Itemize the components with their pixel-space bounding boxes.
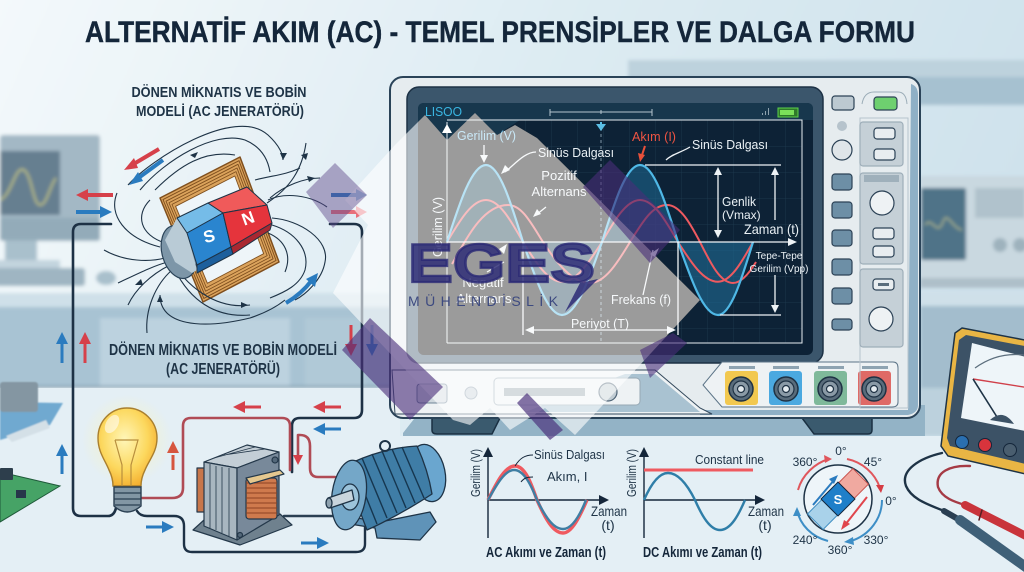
transformer xyxy=(193,445,292,545)
chart: AC current and time xyxy=(468,447,627,561)
screen xyxy=(418,103,813,355)
red sine waves xyxy=(447,200,756,283)
field arrowheads xyxy=(135,152,315,308)
status bar: LISOO xyxy=(425,104,462,119)
rotation angle diagram: 45° xyxy=(864,455,882,469)
circuit board green xyxy=(0,468,60,522)
screen labels: Tepe-Tepe xyxy=(756,251,803,262)
chart: AC current and time: Zaman xyxy=(591,503,627,519)
screen labels: Pozitif xyxy=(541,168,577,183)
chart: AC current and time: Gerilim (V) xyxy=(468,449,483,497)
pole labels xyxy=(201,207,257,247)
blue sine wave xyxy=(447,165,753,315)
rotation angle diagram: 0° xyxy=(835,444,847,458)
circuit board blue xyxy=(0,382,63,442)
current arrows xyxy=(56,149,378,549)
watermark purple shapes xyxy=(306,160,687,440)
heading: generator model bottom xyxy=(109,340,337,378)
chart: DC current and time xyxy=(624,447,784,561)
screen labels: Gerilim (V) xyxy=(430,197,445,257)
connector tray xyxy=(703,362,898,407)
status bar xyxy=(418,103,813,140)
chart: DC current and time: DC Akımı ve Zaman (t) xyxy=(643,545,762,561)
light bulb xyxy=(82,395,172,512)
screen labels: (Vmax) xyxy=(722,208,761,222)
chart: AC current and time: Akım, I xyxy=(547,469,587,484)
axes and measurement lines xyxy=(447,145,792,335)
table surface xyxy=(0,388,1024,572)
oscilloscope xyxy=(333,77,920,435)
coil xyxy=(160,157,279,302)
watermark translucent diamond xyxy=(333,113,700,435)
scope feet xyxy=(432,418,872,434)
right side controls xyxy=(832,92,908,408)
heading: generator model bottom: (AC JENERATÖRÜ) xyxy=(166,359,280,378)
rotation angle diagram: 0° xyxy=(885,494,897,508)
chart: DC current and time: Gerilim (V) xyxy=(624,449,639,497)
screen labels xyxy=(430,128,808,331)
screen labels: Negatif xyxy=(462,275,504,290)
chart: AC current and time: (t) xyxy=(601,517,615,533)
screen labels: Akım (I) xyxy=(632,129,676,144)
screen bezel xyxy=(407,87,823,363)
chart: AC current and time: Sinüs Dalgası xyxy=(534,447,605,462)
arrowheads xyxy=(480,155,797,334)
rotation angle diagram: 360° xyxy=(828,543,853,557)
generator: rotating magnet and coil xyxy=(104,126,327,333)
title: ALTERNATİF AKIM (AC) - TEMEL PRENSİPLER VE DALGA FORMU xyxy=(85,16,915,49)
pole labels: N xyxy=(239,207,257,229)
blue wave fills xyxy=(447,165,523,242)
scope body xyxy=(390,77,920,418)
chart: DC current and time: (t) xyxy=(758,517,772,533)
watermark logo: MÜHENDİSLİK xyxy=(408,292,559,309)
electric motor xyxy=(326,441,451,540)
screen labels: Sinüs Dalgası xyxy=(538,145,614,160)
chart: DC current and time: Constant line xyxy=(695,452,764,467)
heading: generator model top: DÖNEN MİKNATIS VE BOBİN xyxy=(132,84,306,101)
heading: generator model top: MODELİ (AC JENERATÖRÜ) xyxy=(136,103,304,120)
multimeter xyxy=(941,328,1024,475)
rotation angle diagram: 240° xyxy=(793,533,818,547)
magnetic field lines xyxy=(104,126,327,333)
chart: AC current and time: AC Akımı ve Zaman (t) xyxy=(486,545,606,561)
rotation angle diagram: 330° xyxy=(864,533,889,547)
screen labels: Frekans (f) xyxy=(611,292,671,307)
screen labels: Genlik xyxy=(722,194,756,209)
screen labels: Zaman (t) xyxy=(744,221,799,237)
screen labels: Gerilim (Vpp) xyxy=(750,264,808,275)
heading: generator model bottom: DÖNEN MİKNATIS VE BOBİN MODELİ xyxy=(109,340,337,359)
magnet poles xyxy=(177,187,272,273)
plot frame xyxy=(447,120,802,343)
watermark logo xyxy=(408,232,598,312)
screen labels: Periyot (T) xyxy=(571,316,629,331)
rotation angle diagram xyxy=(793,444,897,557)
magnet end cylinder xyxy=(156,222,202,282)
heading: generator model top xyxy=(132,84,306,120)
chart: DC current and time: Zaman xyxy=(748,503,784,519)
rotation angle diagram: 360° xyxy=(793,455,818,469)
scope shadow on table xyxy=(403,405,925,436)
watermark logo: EGES xyxy=(408,232,595,294)
front panel controls bottom left xyxy=(417,378,640,405)
pole labels: S xyxy=(201,226,217,247)
screen labels: Alternans xyxy=(532,184,587,199)
circuit wires xyxy=(73,224,365,552)
screen labels: Gerilim (V) xyxy=(457,128,516,143)
probes xyxy=(905,453,1024,570)
screen labels: Alternans xyxy=(457,291,512,306)
rotation angle diagram: S xyxy=(834,492,843,507)
screen labels: Sinüs Dalgası xyxy=(692,137,768,152)
lower panel xyxy=(392,370,712,414)
